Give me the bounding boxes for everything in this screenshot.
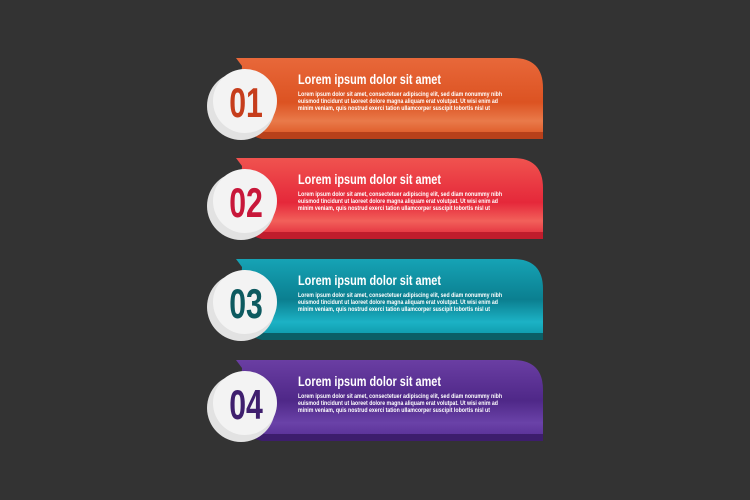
- badge 02: 02: [229, 179, 263, 226]
- badge 01: 01: [229, 79, 263, 126]
- banner 04: [236, 360, 543, 441]
- text 02: Lorem ipsum dolor sit amet: [298, 172, 441, 187]
- text 04: euismod tincidunt ut laoreet dolore magna aliquam erat volutpat. Ut wisi enim ad: [298, 401, 498, 407]
- text 03: [298, 273, 502, 313]
- text 04: [298, 374, 502, 414]
- text 03: minim veniam, quis nostrud exerci tation ullamcorper suscipit lobortis nisl ut: [298, 307, 490, 313]
- banner 02: [236, 158, 543, 239]
- item 01: [207, 58, 543, 140]
- text 03: euismod tincidunt ut laoreet dolore magna aliquam erat volutpat. Ut wisi enim ad: [298, 300, 498, 306]
- text 02: [298, 172, 502, 212]
- text 01: euismod tincidunt ut laoreet dolore magna aliquam erat volutpat. Ut wisi enim ad: [298, 99, 498, 105]
- text 02: euismod tincidunt ut laoreet dolore magna aliquam erat volutpat. Ut wisi enim ad: [298, 199, 498, 205]
- badge 03: [207, 270, 277, 341]
- text 01: Lorem ipsum dolor sit amet, consectetuer adipiscing elit, sed diam nonummy nibh: [298, 92, 502, 98]
- badge 04: [207, 371, 277, 442]
- item 03: [207, 259, 543, 341]
- banner 03: [236, 259, 543, 340]
- badge 01: [207, 69, 277, 140]
- banner 01: [236, 58, 543, 139]
- text 01: Lorem ipsum dolor sit amet: [298, 72, 441, 87]
- text 01: minim veniam, quis nostrud exerci tation ullamcorper suscipit lobortis nisl ut: [298, 106, 490, 112]
- text 01: [298, 72, 502, 112]
- text 03: Lorem ipsum dolor sit amet, consectetuer adipiscing elit, sed diam nonummy nibh: [298, 293, 502, 299]
- item 04: [207, 360, 543, 442]
- text 04: Lorem ipsum dolor sit amet: [298, 374, 441, 389]
- text 03: Lorem ipsum dolor sit amet: [298, 273, 441, 288]
- text 02: Lorem ipsum dolor sit amet, consectetuer adipiscing elit, sed diam nonummy nibh: [298, 192, 502, 198]
- text 02: minim veniam, quis nostrud exerci tation ullamcorper suscipit lobortis nisl ut: [298, 206, 490, 212]
- text 04: minim veniam, quis nostrud exerci tation ullamcorper suscipit lobortis nisl ut: [298, 408, 490, 414]
- text 04: Lorem ipsum dolor sit amet, consectetuer adipiscing elit, sed diam nonummy nibh: [298, 394, 502, 400]
- badge 02: [207, 169, 277, 240]
- badge 03: 03: [229, 280, 263, 327]
- item 02: [207, 158, 543, 240]
- badge 04: 04: [229, 381, 263, 428]
